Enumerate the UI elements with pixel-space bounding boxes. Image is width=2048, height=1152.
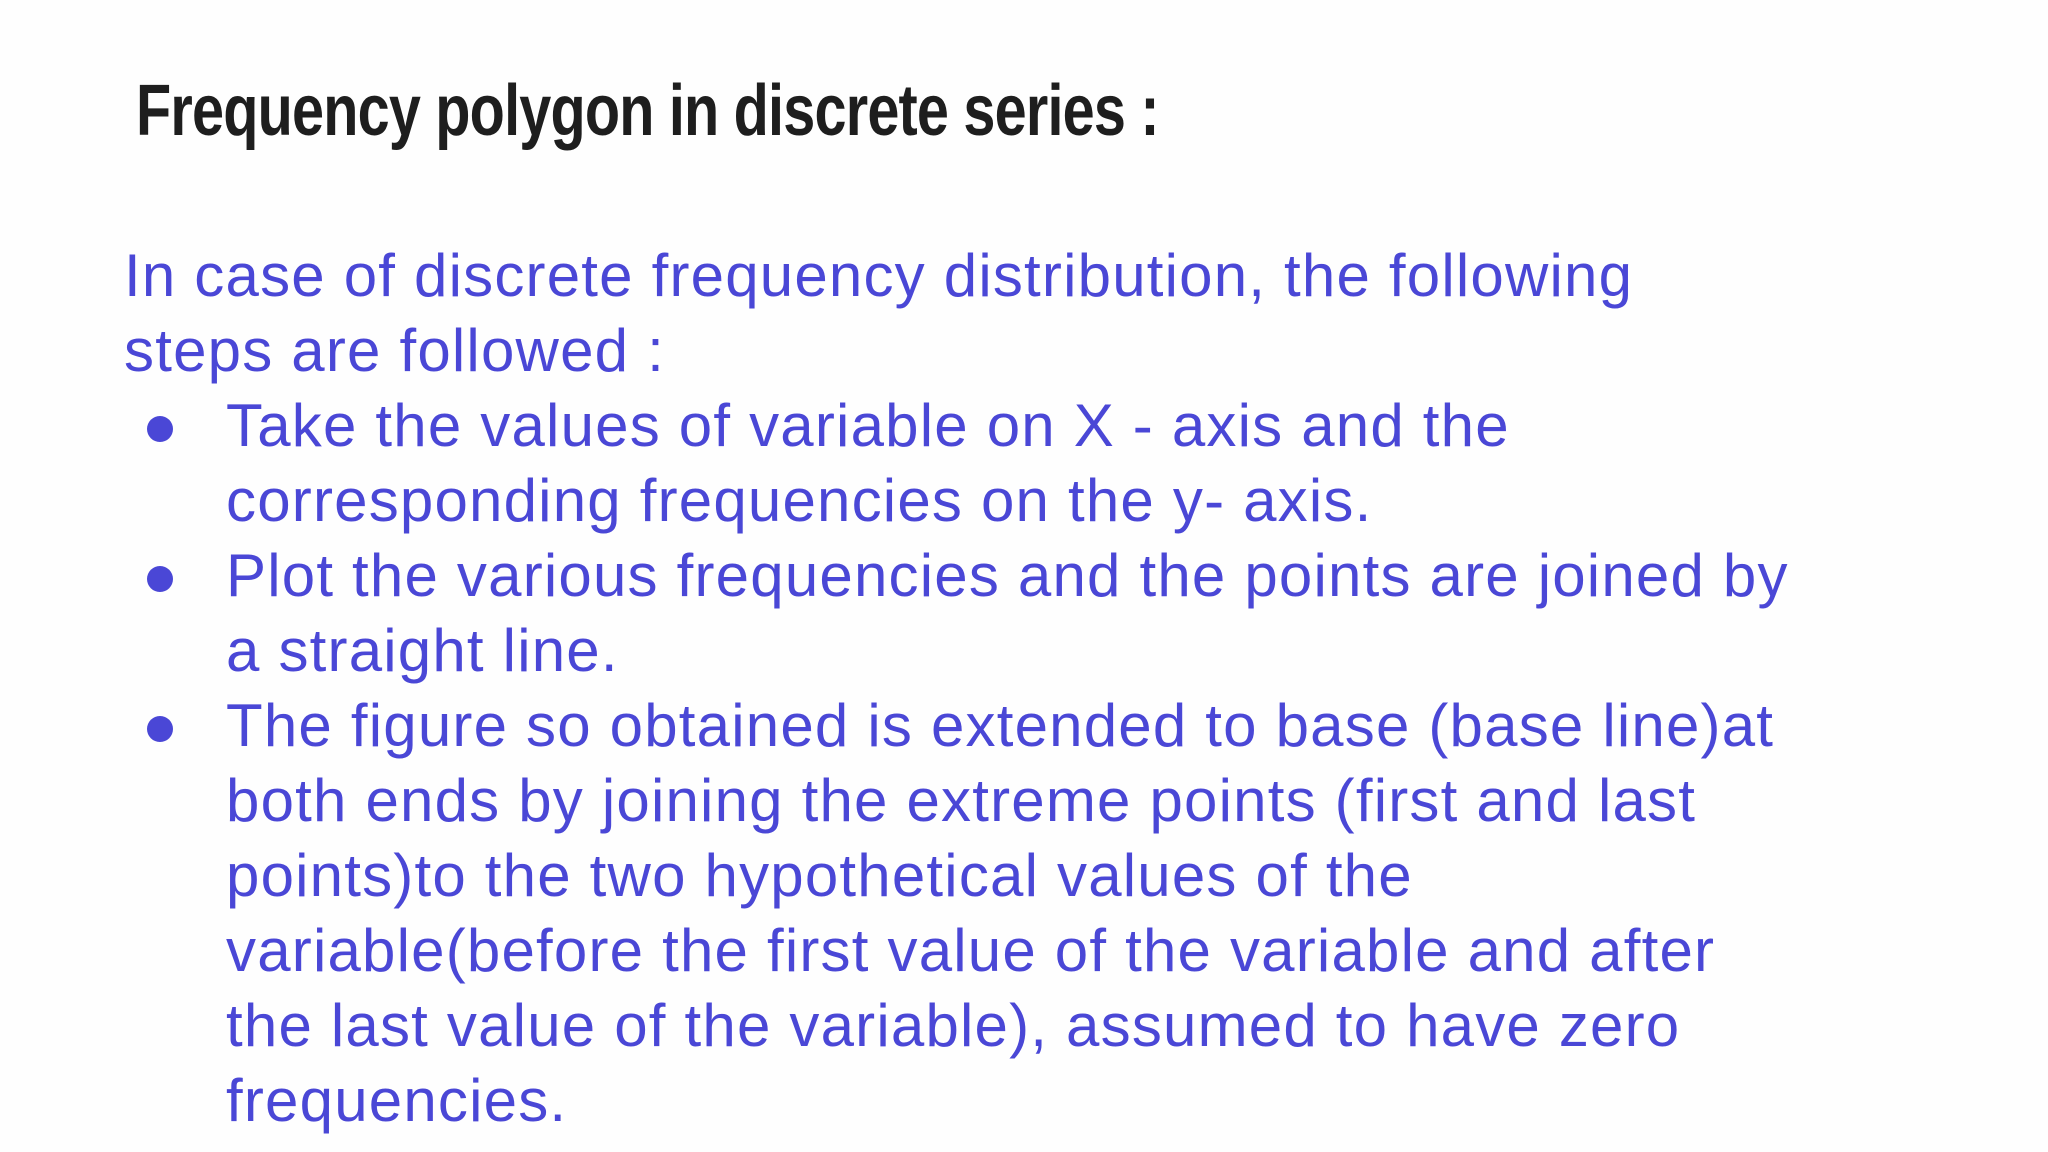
bullet 2: Plot the various frequencies and the points are joined by: [226, 542, 1789, 609]
bullet 2: [147, 542, 1789, 684]
bullet 1: [147, 392, 1510, 534]
bullet 3: both ends by joining the extreme points (first and last: [226, 767, 1696, 834]
bullet 3: [147, 692, 1774, 1134]
bullet 3: The figure so obtained is extended to base (base line)at: [226, 692, 1774, 759]
bullet 3: the last value of the variable), assumed to have zero: [226, 992, 1680, 1059]
bullet 3: variable(before the first value of the variable and after: [226, 917, 1715, 984]
text block: intro and steps: [124, 242, 1789, 1134]
bullet 3: points)to the two hypothetical values of the: [226, 842, 1413, 909]
bullet 1: corresponding frequencies on the y- axis.: [226, 467, 1372, 534]
bullet 2: a straight line.: [226, 617, 619, 684]
intro text: steps are followed :: [124, 317, 665, 384]
title: Frequency polygon in discrete series :: [136, 71, 1159, 151]
bullet 1: Take the values of variable on X - axis and the: [226, 392, 1510, 459]
bullet 3: frequencies.: [226, 1067, 567, 1134]
intro text: [124, 242, 1633, 384]
intro text: In case of discrete frequency distribution, the following: [124, 242, 1633, 309]
